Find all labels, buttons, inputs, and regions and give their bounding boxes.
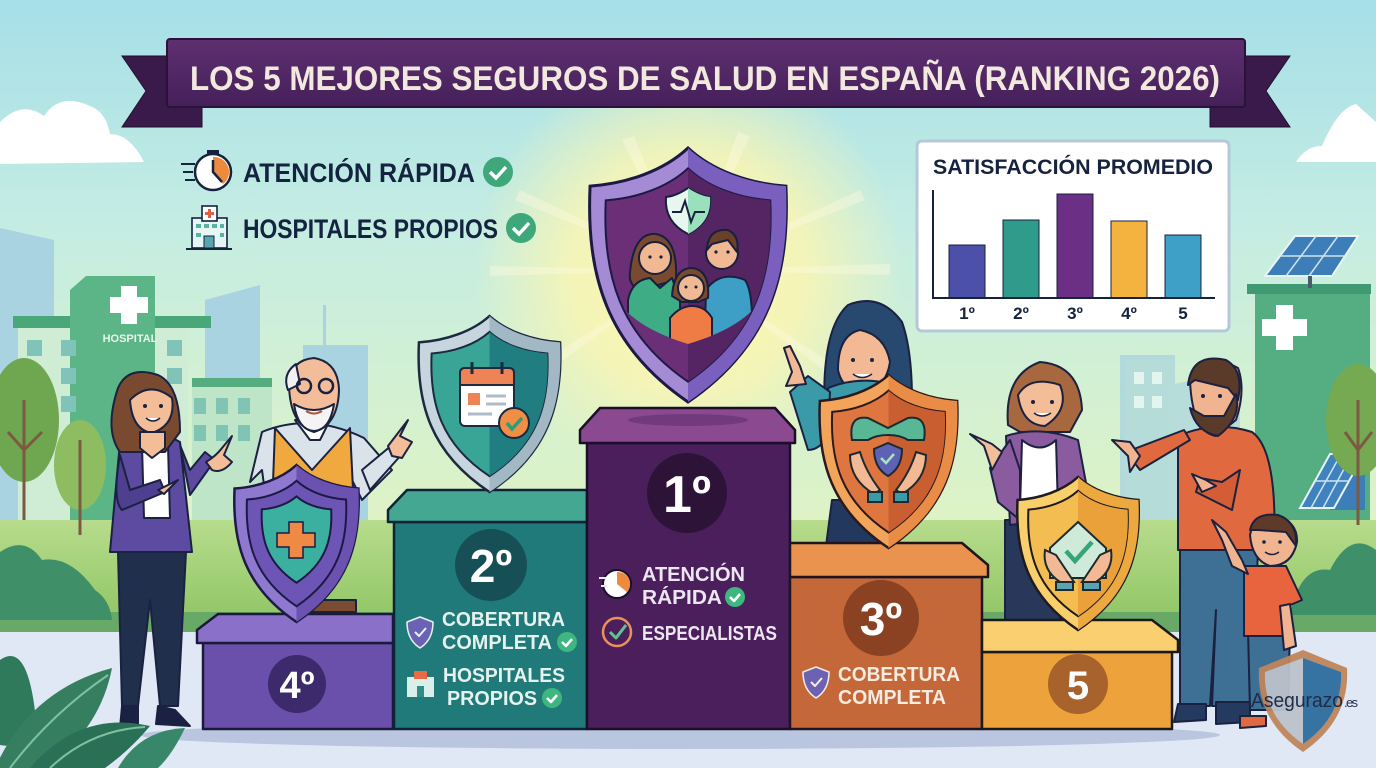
icon: home in hands — [1045, 522, 1111, 590]
trees left — [0, 358, 106, 535]
rank 5: 5 — [1067, 664, 1089, 708]
podium: 1st place — [580, 408, 795, 729]
foreground plant — [0, 656, 185, 768]
title: LOS 5 MEJORES SEGUROS DE SALUD EN ESPAÑA (RANKING 2026) — [190, 60, 1220, 98]
rank 3: 3º — [860, 593, 902, 645]
ribbon right — [1210, 56, 1290, 127]
shield: 3rd hands — [820, 375, 957, 548]
axis labels: 3º — [1067, 304, 1083, 323]
solar panel top — [1265, 236, 1358, 288]
bushes — [0, 543, 1376, 620]
grass — [0, 520, 1376, 615]
feature: cobertura completa: COMPLETA — [442, 632, 552, 654]
feature: cobertura completa: COBERTURA — [442, 609, 565, 631]
hospital left — [13, 276, 272, 528]
title banner — [122, 39, 1290, 127]
axis labels: 4º — [1121, 304, 1137, 323]
shield: 4th cross — [234, 465, 359, 622]
rank 3 — [843, 580, 919, 656]
axis labels: 1º — [959, 304, 975, 323]
chart title: SATISFACCIÓN PROMEDIO — [933, 155, 1213, 179]
path ground — [0, 632, 1376, 768]
icon: hospital — [186, 206, 232, 249]
sun glow — [473, 55, 903, 485]
person: woman in purple cardigan — [970, 362, 1092, 620]
feature legend — [181, 150, 536, 249]
feature: hospitales propios: HOSPITALES — [443, 665, 565, 687]
icon: calendar — [460, 362, 529, 438]
feature: especialistas: ESPECIALISTAS — [642, 623, 777, 645]
rank 2: 2º — [470, 540, 512, 592]
feature: atención rápida — [599, 562, 745, 609]
banner body — [167, 39, 1245, 107]
icon: stopwatch — [181, 150, 231, 190]
rank 2 — [455, 529, 527, 601]
label: hospitales propios: HOSPITALES PROPIOS — [243, 214, 498, 244]
rank 4 — [268, 655, 326, 713]
person: older man with glasses — [250, 358, 412, 612]
axes — [933, 190, 1215, 298]
shield: 5th home — [1017, 477, 1139, 630]
axis labels — [959, 304, 1188, 323]
icon: hands and small shield — [850, 418, 926, 502]
podium: 3rd place — [790, 543, 988, 729]
clouds — [0, 101, 1376, 164]
label: atención rápida: ATENCIÓN RÁPIDA — [243, 157, 475, 188]
feature: cobertura completa — [803, 664, 960, 709]
hospital left: HOSPITAL — [103, 333, 158, 345]
hospital right — [1125, 284, 1371, 532]
axis labels: 5 — [1178, 304, 1188, 323]
check — [506, 213, 536, 243]
feature: cobertura completa: COBERTURA — [838, 664, 960, 686]
rank 1 — [647, 453, 727, 533]
feature: cobertura completa — [407, 609, 577, 654]
podium shadow — [140, 721, 1220, 749]
solar panel bottom — [1300, 453, 1365, 510]
podium: 5th place — [982, 620, 1178, 729]
axis labels: 2º — [1013, 304, 1029, 323]
person: woman in purple blazer — [110, 372, 232, 728]
feature: hospitales propios — [407, 665, 565, 710]
watermark: Asegurazo.es — [1251, 650, 1358, 752]
rank 4: 4º — [279, 665, 315, 707]
feature: atención rápida: RÁPIDA — [642, 586, 722, 609]
shield: 1st family — [590, 148, 786, 402]
watermark text: Asegurazo — [1251, 690, 1343, 712]
icon: mini pulse shield — [666, 188, 710, 234]
ribbon left — [122, 56, 202, 127]
trees right — [1326, 364, 1376, 525]
person: woman with blue hair — [784, 301, 912, 546]
person: man in orange sweater — [1112, 358, 1275, 724]
feature: atención rápida: ATENCIÓN — [642, 562, 745, 586]
rank 5 — [1048, 654, 1108, 714]
rank 1: 1º — [663, 466, 711, 524]
watermark domain: .es — [1344, 695, 1358, 710]
city silhouettes — [0, 228, 1240, 520]
podium top highlight — [628, 414, 748, 426]
check — [483, 157, 513, 187]
bar chart panel: satisfacción promedio — [917, 141, 1229, 331]
family — [628, 230, 752, 360]
watermark shield — [1259, 650, 1347, 752]
podium: 4th place — [197, 614, 393, 729]
feature: hospitales propios: PROPIOS — [447, 688, 537, 710]
bars — [949, 194, 1201, 298]
feature: especialistas — [603, 618, 777, 646]
podium: 2nd place — [388, 490, 587, 729]
person: boy in orange shirt — [1212, 515, 1302, 728]
shield: 2nd calendar — [419, 316, 560, 492]
feature: cobertura completa: COMPLETA — [838, 687, 946, 709]
icon: orange cross — [277, 522, 315, 558]
